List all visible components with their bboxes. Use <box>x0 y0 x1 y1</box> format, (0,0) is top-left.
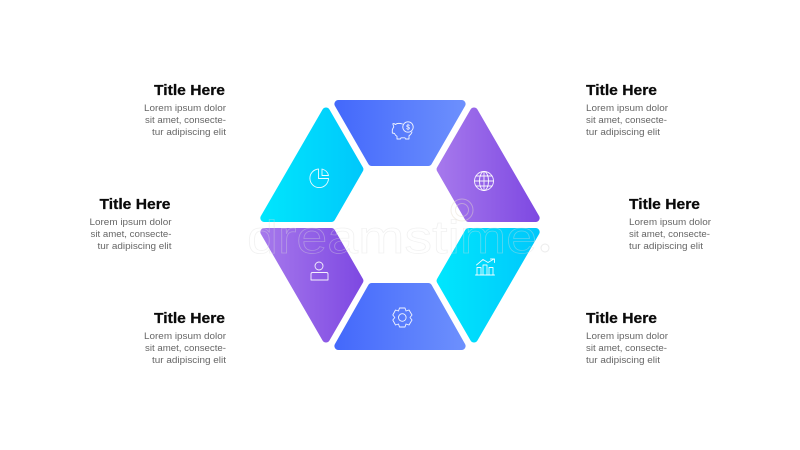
text block: bottom left: sit amet, consecte- <box>145 343 226 353</box>
segment: upper right purple <box>437 108 540 222</box>
text block: middle right: sit amet, consecte- <box>629 229 710 239</box>
text block: top left: tur adipiscing elit <box>152 127 227 137</box>
text block: middle left: Lorem ipsum dolor <box>90 217 172 227</box>
text block: middle right: Lorem ipsum dolor <box>629 217 711 227</box>
text block: middle left <box>90 196 172 251</box>
icon: pie chart <box>310 169 328 188</box>
text block: middle left: tur adipiscing elit <box>98 241 172 251</box>
text block: bottom right: Title Here <box>586 310 657 327</box>
text block: bottom right: sit amet, consecte- <box>586 343 667 353</box>
text block: top left: Lorem ipsum dolor <box>144 103 226 113</box>
text block: top left <box>144 82 227 137</box>
segment: bottom blue trapezoid <box>334 283 466 350</box>
text block: top left: Title Here <box>154 82 225 99</box>
text block: middle right <box>629 196 711 251</box>
icon: bar chart with arrow <box>476 259 494 275</box>
segment: lower right cyan <box>437 228 540 342</box>
text block: middle left: sit amet, consecte- <box>90 229 172 239</box>
text block: bottom right: Lorem ipsum dolor <box>586 331 668 341</box>
text block: top right <box>586 82 668 137</box>
text block: top left: sit amet, consecte- <box>145 115 226 125</box>
text block: top right: Title Here <box>586 82 657 99</box>
text block: bottom left: Lorem ipsum dolor <box>144 331 226 341</box>
text block: top right: Lorem ipsum dolor <box>586 103 668 113</box>
text block: bottom left: Title Here <box>154 310 225 327</box>
text block: bottom right: tur adipiscing elit <box>586 355 661 365</box>
text block: top right: sit amet, consecte- <box>586 115 667 125</box>
text block: top right: tur adipiscing elit <box>586 127 661 137</box>
watermark: dreamstime <box>247 211 537 263</box>
segment: upper left cyan <box>260 108 363 222</box>
segment: lower left purple <box>260 228 363 342</box>
text block: middle left: Title Here <box>100 196 170 213</box>
icon: globe <box>474 172 494 190</box>
text block: middle right: tur adipiscing elit <box>629 241 704 251</box>
text block: bottom left: tur adipiscing elit <box>152 355 227 365</box>
icon: gear <box>393 308 412 327</box>
segment: top blue trapezoid <box>334 100 466 166</box>
icon: piggy bank <box>392 122 413 139</box>
text block: bottom left <box>144 310 227 365</box>
icon: person <box>311 262 328 280</box>
text block: middle right: Title Here <box>629 196 700 213</box>
watermark <box>247 199 549 263</box>
text block: bottom right <box>586 310 668 365</box>
